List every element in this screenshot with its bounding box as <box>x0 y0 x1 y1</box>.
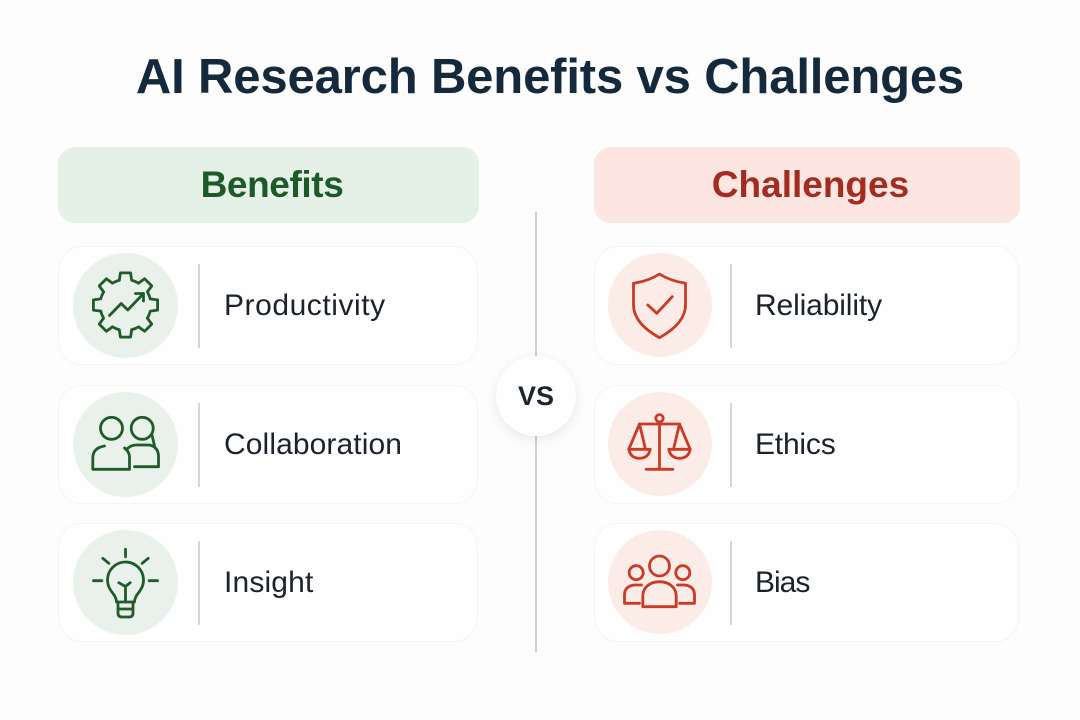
center divider line <box>535 212 537 652</box>
panel: reliability card <box>594 246 1019 365</box>
separator <box>198 264 200 348</box>
icon: group of people <box>623 554 696 608</box>
panel: insight card <box>58 523 478 642</box>
separator <box>198 541 200 625</box>
heading: challenges: Challenges <box>712 164 909 205</box>
icon: shield with check <box>632 272 687 340</box>
vs badge <box>496 356 576 436</box>
icon background: bias <box>608 530 712 634</box>
label: productivity: Productivity <box>224 289 386 322</box>
vs badge: VS <box>518 381 554 411</box>
separator <box>198 403 200 487</box>
title: AI Research Benefits vs Challenges <box>136 50 964 104</box>
heading: benefits <box>58 147 479 223</box>
panel: collaboration card <box>58 385 478 504</box>
label: ethics: Ethics <box>755 428 836 461</box>
panel: productivity card <box>58 246 478 365</box>
icon background: reliability <box>608 252 712 356</box>
panel: bias card <box>594 523 1019 642</box>
label: insight: Insight <box>224 566 313 599</box>
icon background: ethics <box>608 392 712 496</box>
heading: benefits: Benefits <box>201 164 343 205</box>
label: reliability: Reliability <box>755 289 882 322</box>
label: collaboration: Collaboration <box>224 428 402 461</box>
separator <box>730 541 732 625</box>
label: bias: Bias <box>755 566 809 599</box>
panel: ethics card <box>594 385 1019 504</box>
separator <box>730 403 732 487</box>
icon background: insight <box>73 530 178 634</box>
icon background: productivity <box>73 252 178 358</box>
icon: balance scale <box>627 413 692 471</box>
icon background: collaboration <box>73 392 178 496</box>
icon: light bulb <box>92 548 159 618</box>
separator <box>730 264 732 348</box>
icon: gear with rising arrow <box>92 272 159 338</box>
heading: challenges <box>594 147 1020 223</box>
icon: two people <box>91 416 160 471</box>
